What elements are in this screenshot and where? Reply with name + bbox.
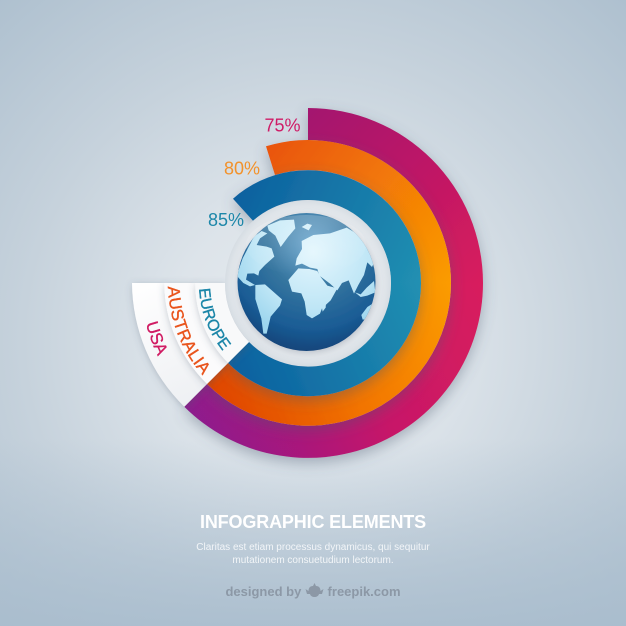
Africa	[288, 268, 337, 318]
North America	[237, 231, 274, 286]
ring: magenta 75%	[184, 108, 483, 458]
title: INFOGRAPHIC ELEMENTS	[200, 512, 426, 532]
label strip: Australia	[164, 283, 228, 384]
ring: orange 80%	[207, 140, 451, 426]
Madagascar	[322, 304, 326, 312]
Greenland	[267, 220, 295, 247]
South East Asia	[355, 281, 375, 297]
globe backing disc	[225, 200, 391, 366]
Arctic islands	[302, 224, 312, 230]
label: USA: USA	[147, 321, 167, 356]
percentage: 85%: 85%	[208, 210, 244, 230]
Eurasia	[295, 228, 375, 294]
label: Europe: EUROPE	[198, 288, 232, 351]
credit: freepik: designed by freepik.com	[225, 584, 401, 599]
label: Australia: AUSTRALIA	[168, 286, 209, 376]
globe	[237, 213, 377, 351]
Australia	[361, 304, 372, 320]
description: mutationem consuetudium lectorum.	[232, 555, 394, 566]
percentage: 75%: 75%	[264, 116, 301, 136]
description	[196, 542, 430, 566]
description: Claritas est etiam processus dynamicus, qui sequitur	[196, 542, 430, 553]
percentage: 80%: 80%	[224, 158, 260, 178]
South America	[255, 284, 282, 334]
label strip: USA	[132, 283, 207, 407]
label strip: Europe	[195, 283, 249, 363]
ring: blue 85%	[228, 170, 421, 396]
